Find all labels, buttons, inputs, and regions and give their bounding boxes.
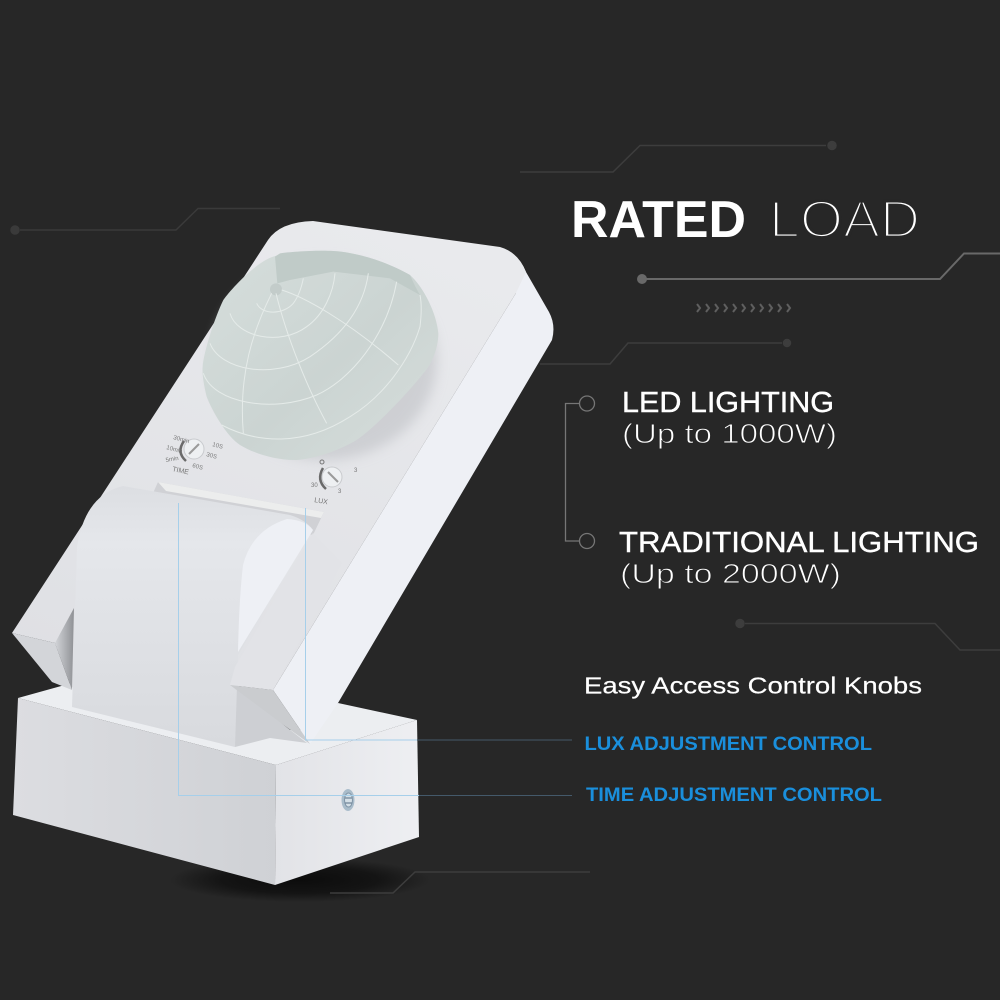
time knob — [165, 435, 223, 477]
PIR dome lens — [202, 251, 438, 460]
lux knob: 3 — [354, 468, 358, 474]
circuit line: bottom — [330, 872, 590, 893]
traditional lighting text: (Up to 2000W) — [620, 558, 841, 589]
recess lip — [158, 482, 324, 518]
base front face — [13, 698, 276, 885]
base top surface — [18, 683, 417, 765]
time knob: 30min — [172, 435, 190, 445]
leader line: time — [178, 503, 572, 796]
lens top faceted patch — [275, 251, 420, 295]
recess above bracket — [150, 482, 324, 535]
circuit line: lower right — [736, 620, 1000, 650]
sensor face plate — [12, 221, 526, 690]
time label: TIME ADJUSTMENT CONTROL — [586, 784, 882, 806]
LED lighting text — [622, 387, 837, 449]
right arm lower facet — [230, 685, 310, 744]
circuit line: upper left — [11, 208, 280, 234]
bracket side under arm — [232, 680, 307, 747]
bracket connector with two rings — [566, 396, 594, 548]
right arm face — [230, 533, 342, 690]
time knob: TIME — [172, 466, 190, 477]
LED lighting text: (Up to 1000W) — [622, 418, 837, 449]
chevron row — [697, 304, 790, 312]
circuit line: top right — [520, 142, 836, 172]
bracket rounded cap — [238, 519, 313, 652]
lux knob: LUX — [314, 497, 329, 506]
time knob: 10S — [211, 442, 223, 451]
LED lighting text: LED LIGHTING — [622, 387, 834, 419]
shadow under base — [170, 858, 430, 902]
circuit line: middle — [540, 340, 790, 364]
bracket — [72, 486, 313, 747]
sensor side band — [273, 248, 553, 744]
screw — [342, 789, 354, 811]
knobs heading: Easy Access Control Knobs — [584, 672, 922, 698]
product: motion sensor — [12, 221, 590, 902]
traditional lighting text — [619, 527, 979, 589]
time knob: 30S — [205, 452, 217, 461]
title: LOAD — [769, 191, 920, 249]
left arm lower facets — [12, 608, 74, 690]
lens ribs — [203, 273, 421, 439]
leader line: lux — [306, 508, 572, 740]
title — [571, 191, 920, 249]
time knob: 60S — [191, 463, 203, 472]
dome soft shadow — [213, 260, 437, 460]
base right face — [275, 720, 419, 885]
time knob: 10min — [165, 445, 183, 455]
time knob: 5min — [165, 456, 179, 464]
lux label: LUX ADJUSTMENT CONTROL — [584, 733, 872, 755]
lux knob: 3 — [338, 489, 342, 495]
lux knob: 30 — [311, 483, 318, 489]
circuit line: under title — [637, 254, 1000, 284]
lux knob — [311, 460, 358, 506]
title: RATED — [571, 191, 746, 249]
traditional lighting text: TRADITIONAL LIGHTING — [619, 527, 979, 559]
